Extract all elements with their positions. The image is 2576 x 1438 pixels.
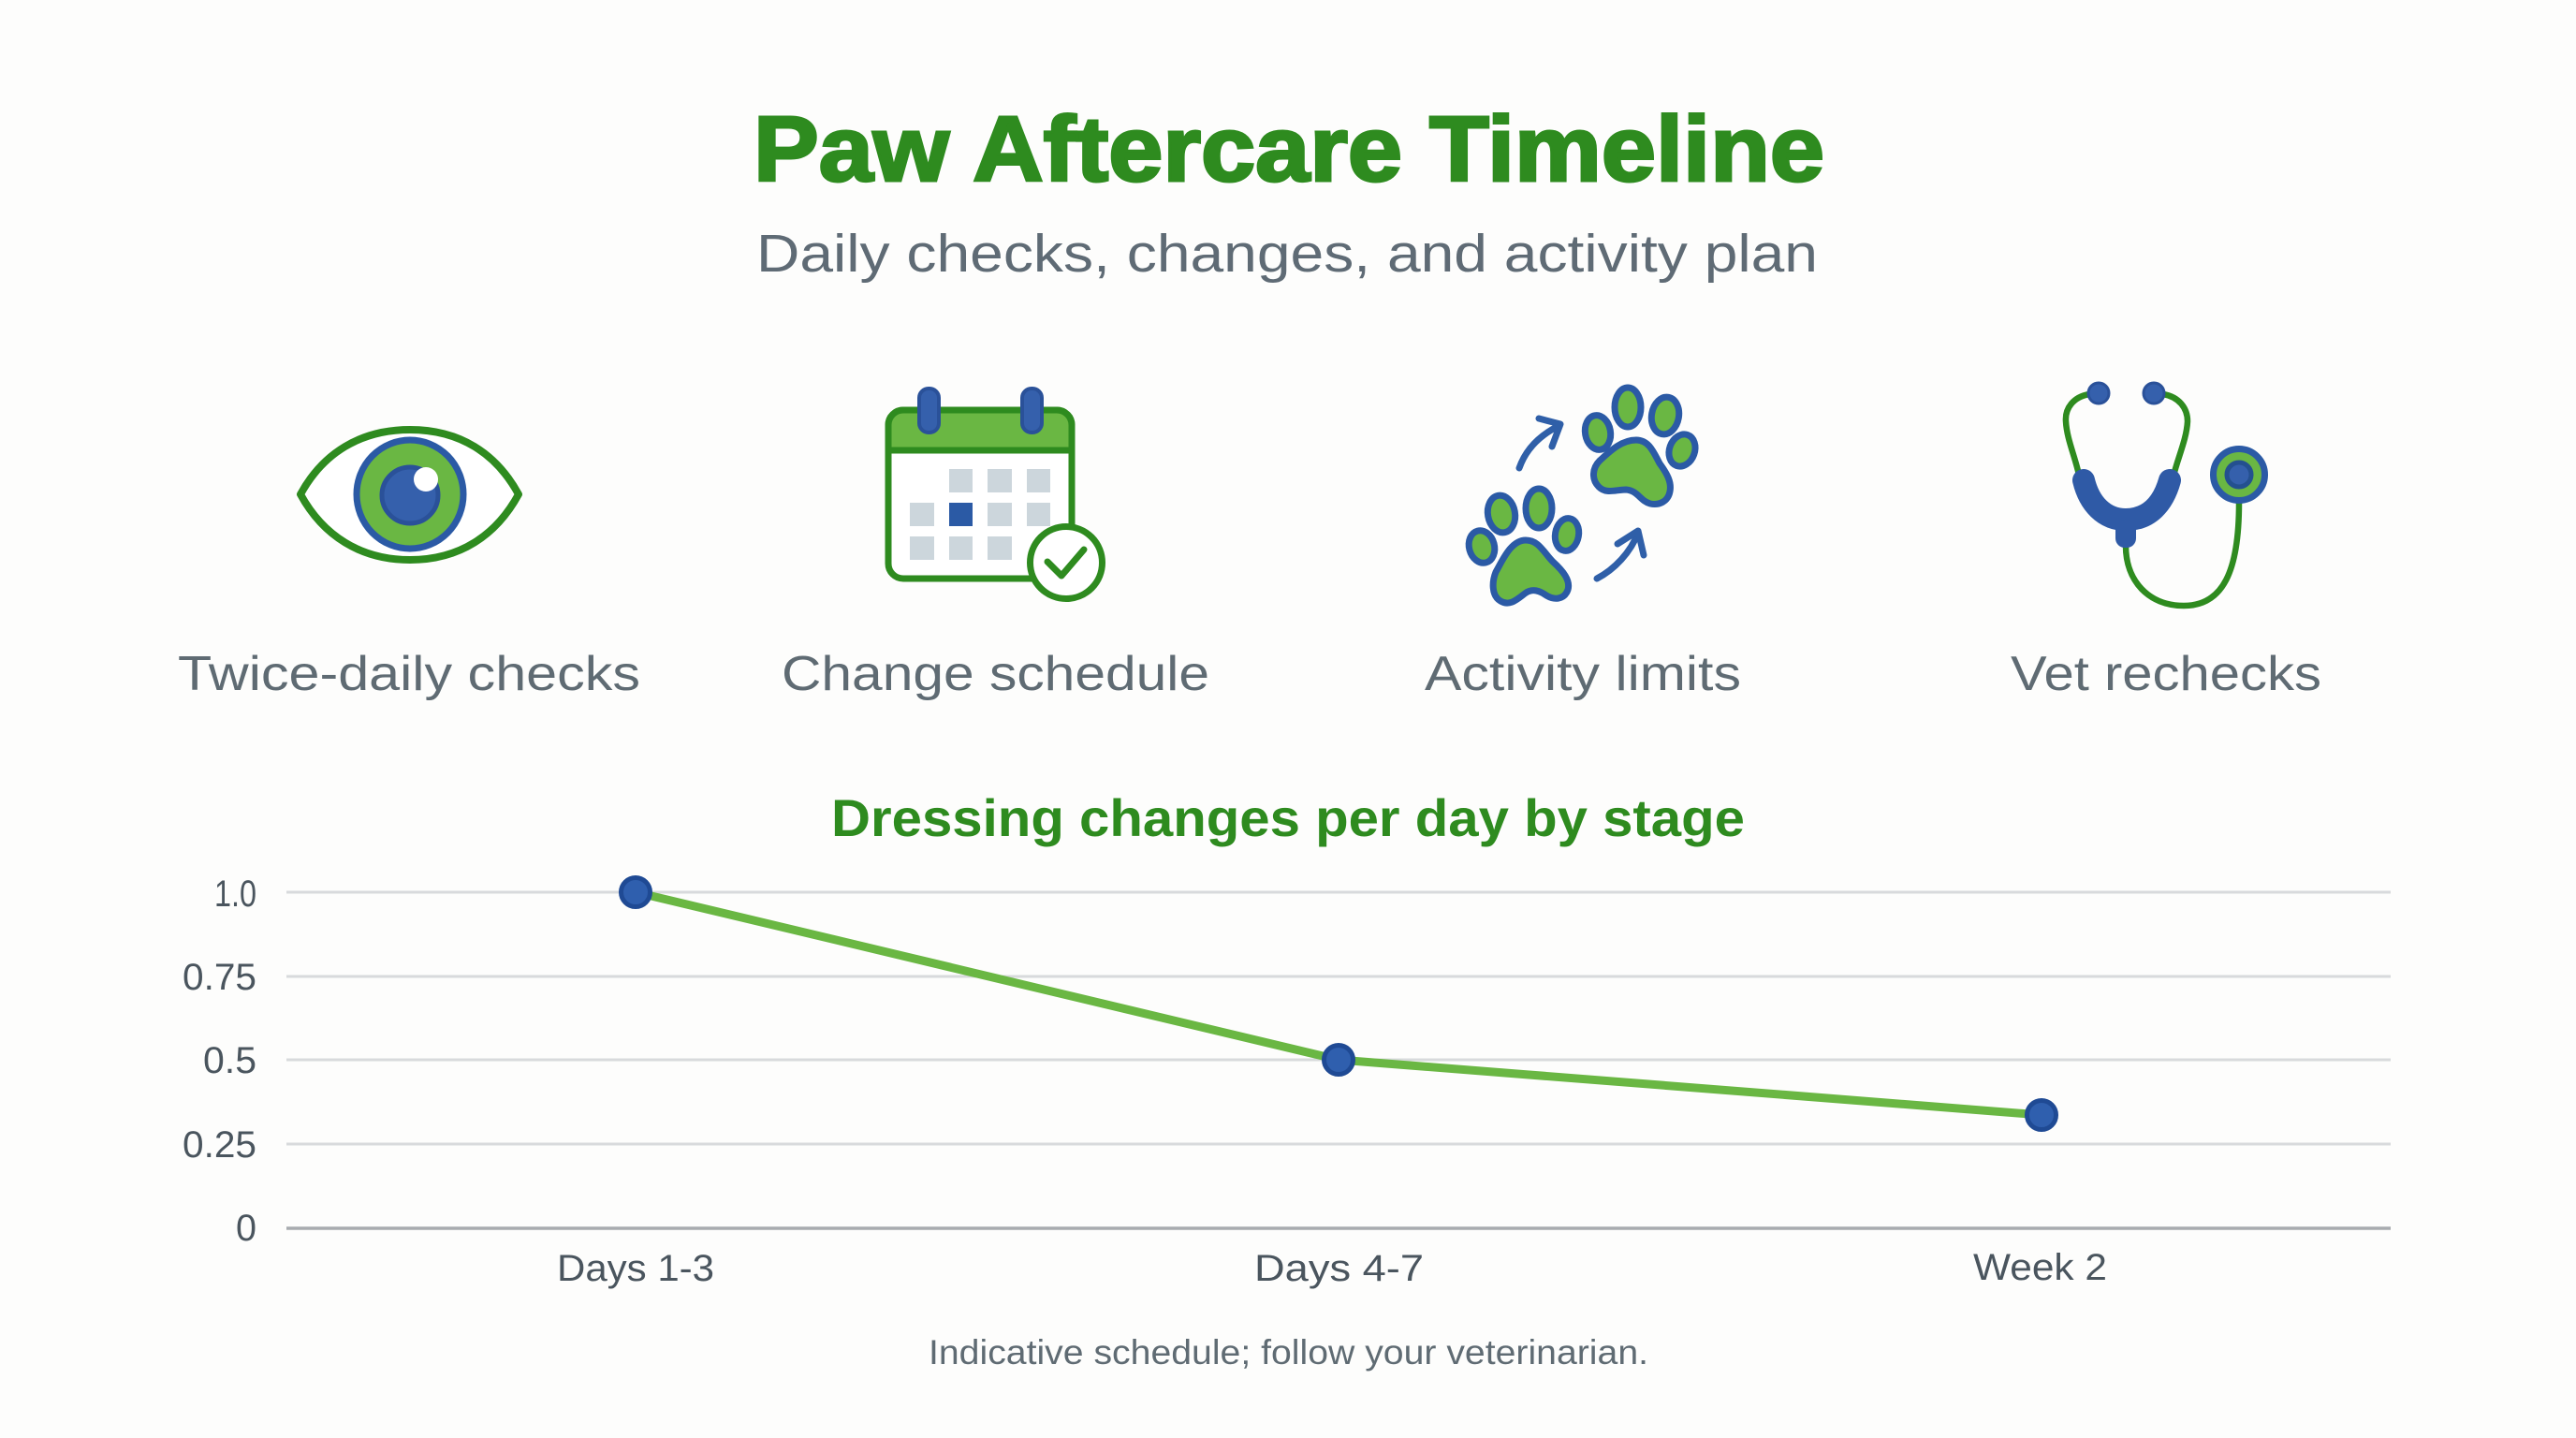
panel: change schedule (782, 389, 1209, 701)
y-axis labels (183, 873, 256, 1249)
icon: calendar with check (888, 389, 1103, 599)
icon: paws with arrows (1465, 388, 1700, 603)
y-axis labels: 0.5 (203, 1040, 256, 1081)
label: twice-daily checks: Twice-daily checks (178, 647, 640, 701)
title: Paw Aftercare Timeline (754, 97, 1824, 200)
subtitle: Daily checks, changes, and activity plan (756, 224, 1818, 284)
label: activity limits: Activity limits (1425, 647, 1741, 701)
data points (622, 878, 2056, 1129)
icon: eye (300, 430, 519, 560)
panel: vet rechecks (2011, 383, 2321, 701)
panel: twice-daily checks (178, 430, 640, 701)
chart heading: Dressing changes per day by stage (831, 788, 1745, 847)
footnote: Indicative schedule; follow your veterinarian. (929, 1333, 1648, 1372)
panel: activity limits (1425, 388, 1741, 701)
line chart: dressing changes per day (183, 873, 2391, 1289)
icon: stethoscope (2066, 383, 2265, 606)
y-axis labels: 1.0 (214, 873, 256, 915)
y-axis labels: 0 (236, 1208, 256, 1249)
label: vet rechecks: Vet rechecks (2011, 647, 2321, 701)
y-axis labels: 0.75 (183, 957, 256, 998)
data line (636, 892, 2042, 1115)
x-axis labels: Days 4-7 (1254, 1248, 1424, 1289)
label: change schedule: Change schedule (782, 647, 1209, 701)
x-axis labels: Days 1-3 (557, 1248, 714, 1289)
x-axis labels: Week 2 (1973, 1247, 2107, 1288)
y-axis labels: 0.25 (183, 1124, 256, 1166)
x-axis labels (557, 1247, 2107, 1289)
